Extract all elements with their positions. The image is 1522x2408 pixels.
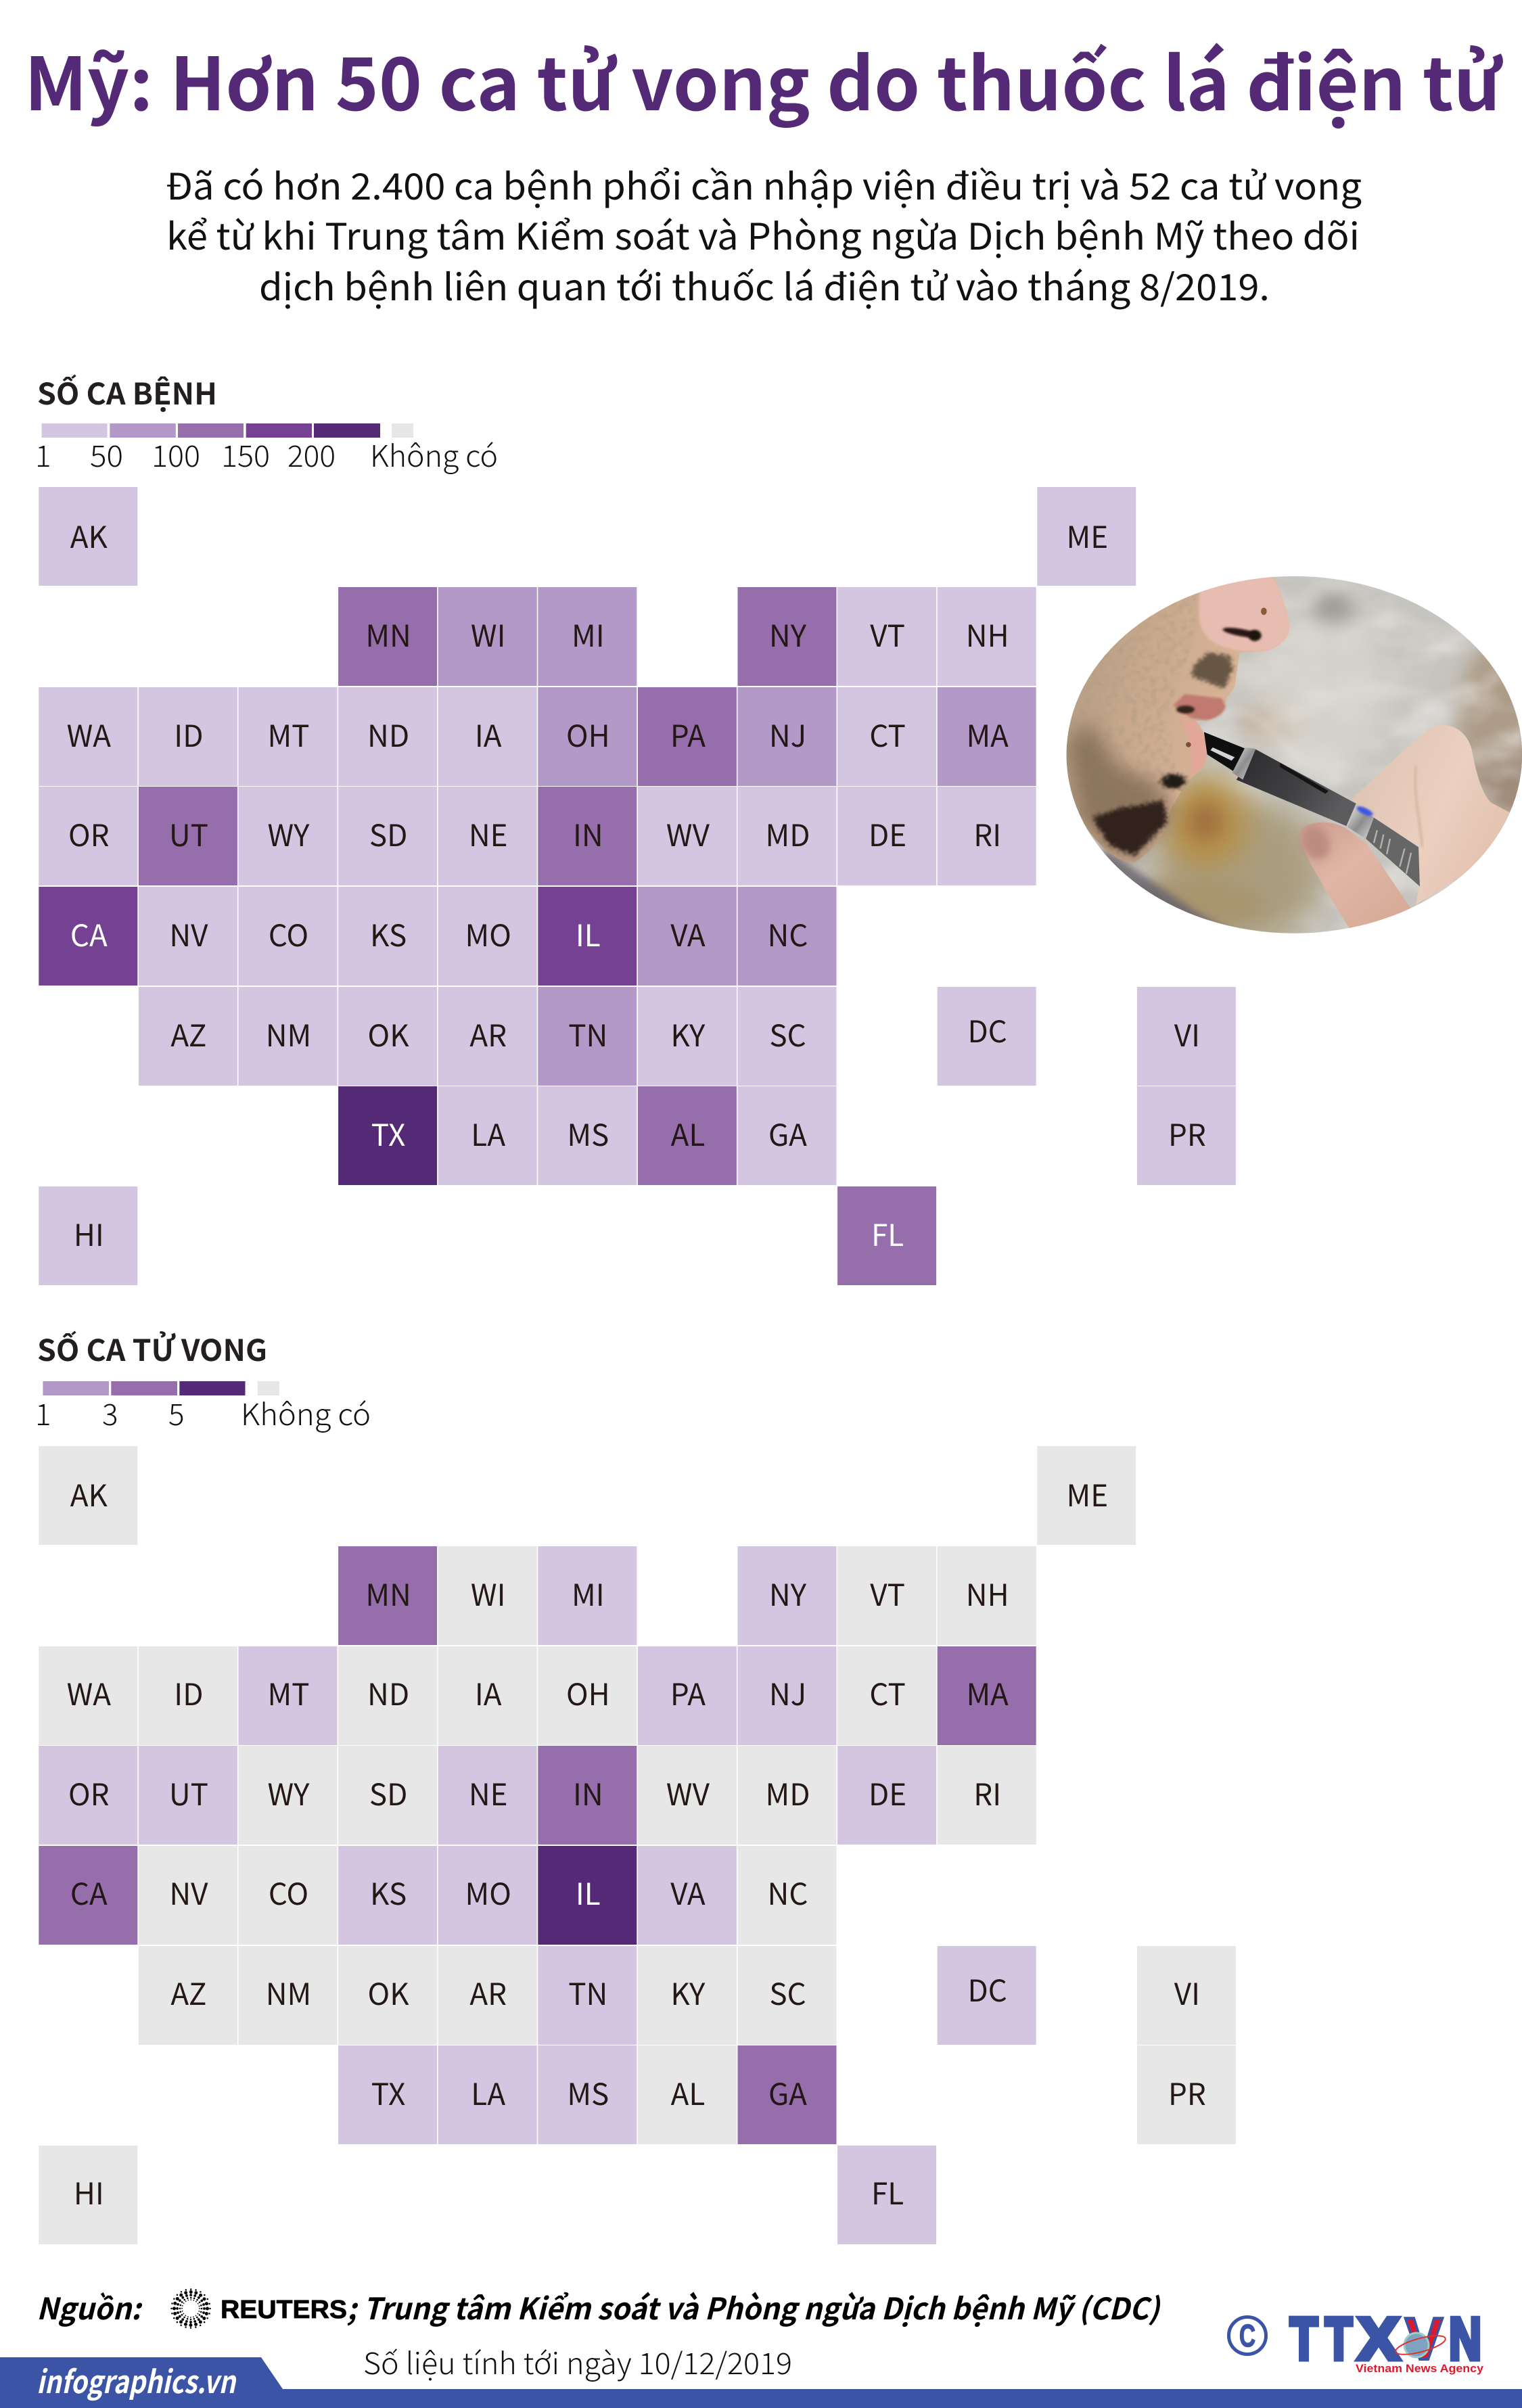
state: WY [238,1746,337,1845]
state: MS: MS [567,2070,609,2114]
logo: TTXVN [1290,2305,1484,2375]
state: ID: ID [174,712,203,756]
state: NV [139,887,237,986]
footer bar [0,2357,1522,2408]
legend: số ca bệnh: 100 [152,432,200,476]
state: SD: SD [369,1771,407,1814]
state: GA [737,2045,836,2144]
state: NJ: NJ [769,712,806,756]
state: IL [538,887,637,986]
state: MN: MN [365,612,411,655]
state: AK [39,1446,137,1545]
state: TN [538,987,637,1086]
legend: số ca tử vong: 5 [168,1391,185,1434]
state: WI [438,587,537,686]
state: OR [39,787,137,885]
state: KY [638,987,737,1086]
state: MO: MO [465,912,511,955]
state: GA: GA [768,2070,807,2114]
state: AR [438,987,537,1086]
legend: số ca bệnh: 200 [287,432,336,476]
logo: TTXVN: N [1449,2305,1481,2372]
state: MO [438,1846,537,1945]
state: CO: CO [269,912,308,955]
state: MA: MA [966,712,1009,756]
state: NH: NH [966,612,1009,655]
state: NM [238,1946,337,2045]
state: DE [837,1746,936,1845]
state: VT [837,1546,936,1645]
state: NH [938,1546,1036,1645]
state: WY: WY [268,812,310,855]
state: NE: NE [469,1771,508,1814]
state: TX: TX [371,2070,405,2114]
state: MS: MS [567,1111,609,1155]
state: VA [638,887,737,986]
state: UT [139,1746,237,1845]
state: MT [238,1646,337,1745]
state: MN [338,587,437,686]
state: IA [438,687,537,786]
title: Mỹ: Hơn 50 ca tử vong do thuốc lá điện tử [24,26,1503,132]
legend: số ca bệnh: 1 [35,432,51,476]
state: WA: WA [67,712,111,756]
state: PA: PA [670,712,706,756]
state: PR [1137,1086,1236,1185]
state: GA [737,1086,836,1185]
state: WY [238,787,337,885]
state: UT: UT [169,1771,208,1814]
state: NH: NH [966,1571,1009,1615]
legend: số ca tử vong: Không có [241,1391,371,1434]
state: AZ: AZ [170,1012,206,1055]
state: KY: KY [670,1012,706,1055]
state: IL: IL [576,912,601,955]
legend: số ca tử vong: 1 [35,1391,51,1434]
state: TN [538,1946,637,2045]
state: SD [338,787,437,885]
state: NC [737,887,836,986]
state: MD [737,1746,836,1845]
state: SC [737,987,836,1086]
state: TN: TN [568,1012,607,1055]
state: RI: RI [973,1771,1001,1814]
state: AZ [139,987,237,1086]
state: OH [538,1646,637,1745]
state: WA [39,687,137,786]
state: WI: WI [471,612,505,655]
state: PA: PA [670,1671,706,1714]
state: OK [338,1946,437,2045]
data date note: Số liệu tính tới ngày 10/12/2019 [363,2340,792,2383]
state: MS [538,2045,637,2144]
state: AL [638,1086,737,1185]
state: VI [1137,987,1236,1086]
state: NE [438,787,537,885]
source text: ; Trung tâm Kiểm soát và Phòng ngừa Dịch bệnh Mỹ (CDC) [347,2285,1161,2328]
state: NY [737,587,836,686]
state: SC [737,1946,836,2045]
state: MT: MT [267,712,310,756]
state: LA: LA [471,1111,505,1155]
state: ME [1037,1446,1136,1545]
state: FL: FL [871,2170,904,2213]
state: MA [938,1646,1036,1745]
state: NC: NC [768,1870,808,1914]
state: IA: IA [475,712,502,756]
state: MI [538,587,637,686]
state: FL: FL [871,1211,904,1255]
state: AL [638,2045,737,2144]
state: DE: DE [869,1771,906,1814]
state: AZ [139,1946,237,2045]
state: PA [638,1646,737,1745]
state: AR [438,1946,537,2045]
state: NC [737,1846,836,1945]
state: VA: VA [670,912,706,955]
state: IL: IL [576,1870,601,1914]
state: SD [338,1746,437,1845]
state: NJ [737,1646,836,1745]
state: MO [438,887,537,986]
tile map: số ca bệnh [39,487,1236,1285]
state: IN: IN [573,1771,603,1814]
state: OK [338,987,437,1086]
heading: số ca bệnh: SỐ CA BỆNH [37,370,217,413]
source label: Nguồn: [37,2285,143,2328]
face [1047,570,1289,862]
state: DC: DC [968,1008,1007,1051]
state: FL [837,1186,936,1285]
state: WI [438,1546,537,1645]
state: OR: OR [68,812,110,855]
state: AL: AL [671,2070,705,2114]
state: ND [338,1646,437,1745]
state: LA [438,1086,537,1185]
state: VI [1137,1946,1236,2045]
state: CT: CT [869,1671,906,1714]
state: WI: WI [471,1571,505,1615]
state: TN: TN [568,1970,607,2014]
state: MI: MI [572,1571,605,1615]
state: LA: LA [471,2070,505,2114]
state: VT [837,587,936,686]
state: KY [638,1946,737,2045]
state: MA [938,687,1036,786]
state: OR: OR [68,1771,110,1814]
state: IA: IA [475,1671,502,1714]
state: ME: ME [1066,1472,1108,1515]
state: AK: AK [70,1472,108,1515]
photo: man vaping an e-cigarette [1047,570,1522,946]
state: MT [238,687,337,786]
state: RI: RI [973,812,1001,855]
state: ID [139,1646,237,1745]
state: NM: NM [266,1012,311,1055]
state: HI: HI [74,1211,104,1255]
state: WA [39,1646,137,1745]
state: KS [338,1846,437,1945]
state: MT: MT [267,1671,310,1714]
state: HI [39,2146,137,2244]
state: RI [938,787,1036,885]
state: LA [438,2045,537,2144]
state: CT [837,687,936,786]
state: AL: AL [671,1111,705,1155]
legend: số ca tử vong [35,1381,371,1434]
state: KS: KS [370,1870,407,1914]
e-cigarette [1204,732,1420,886]
state: CT: CT [869,712,906,756]
state: VI: VI [1174,1970,1200,2014]
state: SC: SC [769,1970,806,2014]
state: NE: NE [469,812,508,855]
state: CO: CO [269,1870,308,1914]
state: CA: CA [70,1870,108,1914]
state: NM: NM [266,1970,311,2014]
state: NV: NV [169,1870,208,1914]
state: UT [139,787,237,885]
state: MD: MD [766,1771,810,1814]
state: OH: OH [566,712,610,756]
state: VA: VA [670,1870,706,1914]
state: CO [238,1846,337,1945]
state: GA: GA [768,1111,807,1155]
state: IA [438,1646,537,1745]
state: WV: WV [666,812,710,855]
state: OK: OK [368,1012,409,1055]
state: OH: OH [566,1671,610,1714]
logo: TTXVN: X [1358,2305,1400,2372]
legend: số ca bệnh: 50 [90,432,123,476]
photo background [1067,576,1522,946]
state: MI [538,1546,637,1645]
state: MS [538,1086,637,1185]
reuters wordmark: REUTERS [221,2296,347,2324]
legend: số ca tử vong: 3 [102,1391,118,1434]
state: HI [39,1186,137,1285]
state: OK: OK [368,1970,409,2014]
state: SD: SD [369,812,407,855]
state: VI: VI [1174,1012,1200,1055]
state: NH [938,587,1036,686]
state: PA [638,687,737,786]
state: WV [638,1746,737,1845]
state: DE [837,787,936,885]
state: ND: ND [367,1671,409,1714]
state: NV: NV [169,912,208,955]
state: AZ: AZ [170,1970,206,2014]
state: CO [238,887,337,986]
state: KS [338,887,437,986]
logo: TTXVN: V [1405,2305,1443,2372]
state: TX: TX [371,1111,405,1155]
state: CA: CA [70,912,108,955]
state: VA [638,1846,737,1945]
state: WV [638,787,737,885]
logo: TTXVN: T [1325,2305,1352,2372]
state: DC [938,987,1036,1086]
intro text block: dịch bệnh liên quan tới thuốc lá điện tử vào tháng 8/2019. [259,258,1270,311]
state: FL [837,2146,936,2244]
state: SC: SC [769,1012,806,1055]
state: ID [139,687,237,786]
state: IN: IN [573,812,603,855]
intro text block: kể từ khi Trung tâm Kiểm soát và Phòng ngừa Dịch bệnh Mỹ theo dõi [166,207,1360,260]
state: VT: VT [870,1571,905,1615]
state: WV: WV [666,1771,710,1814]
raised hand [1352,725,1522,904]
state: CA [39,887,137,986]
state: DC [938,1946,1036,2045]
logo: TTXVN: T [1290,2305,1318,2372]
state: IN [538,787,637,885]
state: PR [1137,2045,1236,2144]
icon: copyright [1228,2317,1266,2354]
state: ID: ID [174,1671,203,1714]
state: MI: MI [572,612,605,655]
state: DC: DC [968,1967,1007,2010]
state: CT [837,1646,936,1745]
intro text block [166,157,1362,311]
state: VT: VT [870,612,905,655]
state: AK [39,487,137,586]
state: CA [39,1846,137,1945]
state: AR: AR [469,1012,507,1055]
state: MN [338,1546,437,1645]
state: RI [938,1746,1036,1845]
state: AR: AR [469,1970,507,2014]
state: PR: PR [1168,2070,1206,2114]
state: WA: WA [67,1671,111,1714]
state: IL [538,1846,637,1945]
legend: số ca bệnh: 150 [221,432,270,476]
state: AK: AK [70,513,108,557]
state: NV [139,1846,237,1945]
state: OR [39,1746,137,1845]
state: ND [338,687,437,786]
legend: số ca bệnh [35,423,498,476]
state: MD: MD [766,812,810,855]
icon: reuters dot logo [172,2289,210,2328]
intro text block: Đã có hơn 2.400 ca bệnh phổi cần nhập viện điều trị và 52 ca tử vong [166,157,1362,210]
state: ND: ND [367,712,409,756]
thumb [1297,823,1411,931]
state: KY: KY [670,1970,706,2014]
state: MD [737,787,836,885]
state: NE [438,1746,537,1845]
state: OH [538,687,637,786]
state: UT: UT [169,812,208,855]
state: NY: NY [769,1571,807,1615]
website label: infographics.vn [37,2358,237,2403]
state: NY [737,1546,836,1645]
icon: copyright: C [1239,2318,1255,2353]
state: NJ: NJ [769,1671,806,1714]
state: KS: KS [370,912,407,955]
state: NM [238,987,337,1086]
state: IN [538,1746,637,1845]
state: TX [338,2045,437,2144]
state: ME: ME [1066,513,1108,557]
state: NY: NY [769,612,807,655]
heading: số ca tử vong: SỐ CA TỬ VONG [37,1326,267,1370]
state: HI: HI [74,2170,104,2213]
state: DE: DE [869,812,906,855]
legend: số ca bệnh: Không có [370,432,498,476]
state: MN: MN [365,1571,411,1615]
logo: TTXVN: Vietnam News Agency [1356,2362,1484,2375]
state: TX [338,1086,437,1185]
state: WY: WY [268,1771,310,1814]
state: PR: PR [1168,1111,1206,1155]
tile map: số ca tử vong [39,1446,1236,2244]
state: ME [1037,487,1136,586]
state: NJ [737,687,836,786]
state: MA: MA [966,1671,1009,1714]
state: NC: NC [768,912,808,955]
state: MO: MO [465,1870,511,1914]
